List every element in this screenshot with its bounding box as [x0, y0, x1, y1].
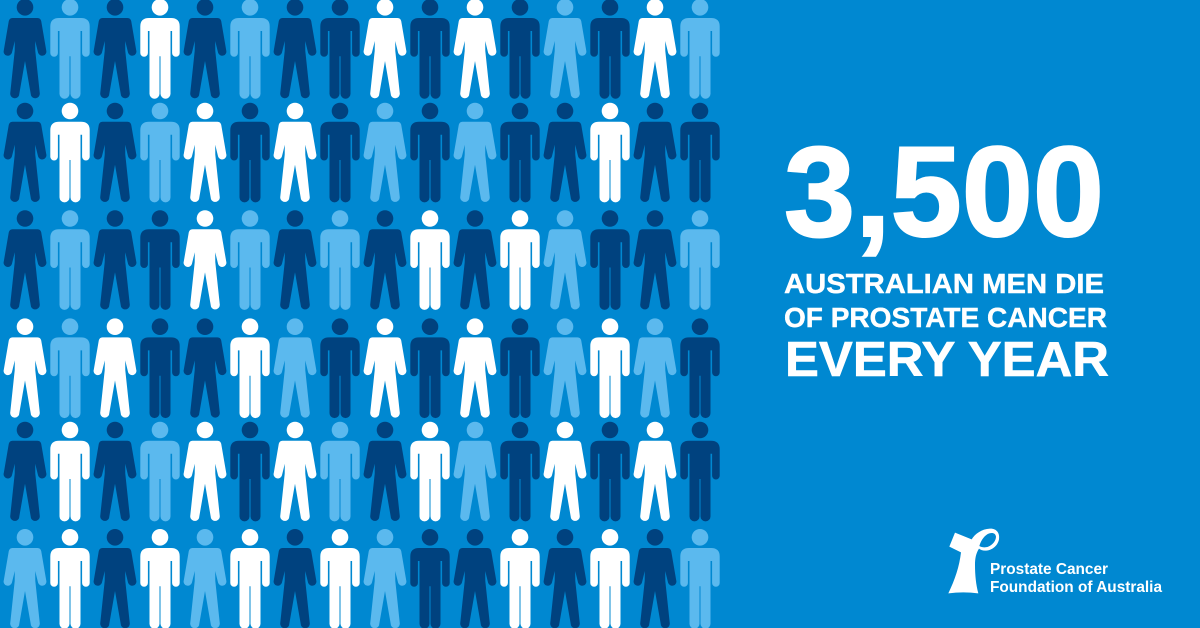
line: every year: EVERY YEAR: [785, 333, 1109, 387]
line: of prostate cancer: OF PROSTATE CANCER: [784, 302, 1107, 333]
row 4 of men: [4, 318, 720, 418]
row 2 of men: [4, 103, 720, 202]
statement text: [784, 268, 1109, 387]
logo text line 2: Foundation of Australia: [990, 579, 1162, 596]
logo text line 1: Prostate Cancer: [990, 561, 1108, 578]
row 1 of men: [4, 0, 720, 99]
row 6 of men: [4, 529, 720, 628]
headline number: 3,500: [784, 121, 1104, 264]
pictogram: grid of men: [4, 0, 720, 628]
line: australian men die: AUSTRALIAN MEN DIE: [784, 268, 1104, 299]
row 3 of men: [4, 210, 720, 310]
icon: ribbon: [948, 529, 999, 593]
row 5 of men: [4, 422, 720, 521]
logo: Prostate Cancer Foundation of Australia: [948, 529, 1162, 596]
